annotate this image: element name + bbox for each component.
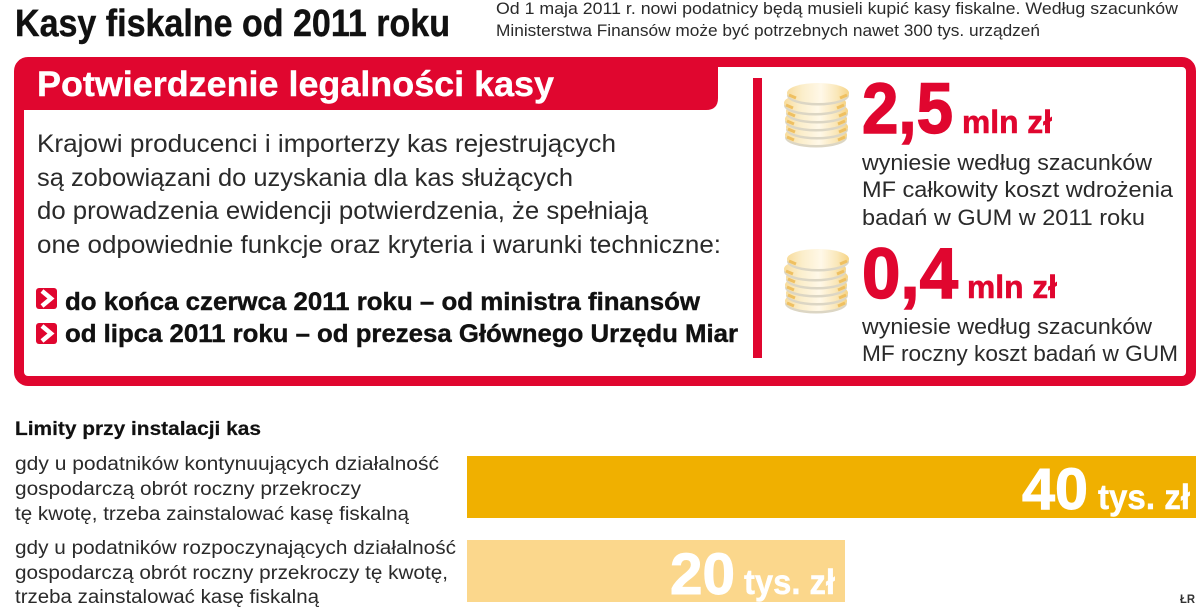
- body text: [37, 130, 721, 259]
- limit 40 description: tę kwotę, trzeba zainstalować kasę fiskalną: [15, 504, 409, 525]
- bar: 20 tys. zł: [467, 540, 845, 607]
- bar: 40 tys. zł: 40: [1022, 457, 1088, 522]
- bar: 40 tys. zł: tys. zł: [1098, 478, 1190, 517]
- stat text 1: wyniesie według szacunków: [861, 150, 1152, 175]
- limit 40 description: gdy u podatników kontynuujących działalność: [15, 454, 439, 475]
- body text: są zobowiązani do uzyskania dla kas służących: [37, 164, 573, 192]
- bar: 20 tys. zł: 20: [670, 542, 735, 607]
- stat text 1: MF całkowity koszt wdrożenia: [862, 177, 1174, 202]
- stat: 0,4 mln zł: mln zł: [967, 269, 1057, 305]
- bullet list: do końca czerwca 2011 roku – od ministra finansów: [65, 288, 701, 316]
- limits heading: Limity przy instalacji kas: [15, 419, 261, 440]
- heading tab: [19, 60, 718, 110]
- stat text 1: badań w GUM w 2011 roku: [862, 205, 1145, 230]
- stat text 2: MF roczny koszt badań w GUM: [862, 341, 1178, 366]
- bar: 20 tys. zł: tys. zł: [744, 563, 835, 602]
- bullet list: [36, 288, 738, 348]
- limit 20 description: gdy u podatników rozpoczynających działalność: [15, 538, 456, 559]
- limit 20 description: trzeba zainstalować kasę fiskalną: [15, 587, 319, 608]
- limit 40 description: [15, 454, 439, 525]
- stat: 2,5 mln zł: [862, 70, 1052, 149]
- stat text 2: [861, 314, 1178, 366]
- stat: 0,4 mln zł: 0,4: [862, 235, 958, 314]
- icon: coins 2: [784, 249, 849, 314]
- body text: Krajowi producenci i importerzy kas rejestrujących: [37, 130, 616, 158]
- body text: one odpowiednie funkcje oraz kryteria i warunki techniczne:: [37, 231, 721, 259]
- bullet list: od lipca 2011 roku – od prezesa Głównego Urzędu Miar: [65, 320, 738, 348]
- icon: coins 1: [784, 83, 849, 148]
- limit 40 description: gospodarczą obrót roczny przekroczy: [15, 479, 362, 500]
- stat: 2,5 mln zł: 2,5: [862, 70, 953, 149]
- heading tab: Potwierdzenie legalności kasy: [37, 65, 555, 104]
- bar: 40 tys. zł: [467, 456, 1196, 522]
- limit 20 description: gospodarczą obrót roczny przekroczy tę kwotę,: [15, 563, 448, 584]
- title: Kasy fiskalne od 2011 roku: [15, 3, 450, 45]
- stat text 1: [861, 150, 1174, 230]
- panel: potwierdzenie legalności kasy: [19, 60, 1191, 381]
- body text: do prowadzenia ewidencji potwierdzenia, że spełniają: [37, 197, 648, 225]
- limit 20 description: [15, 538, 456, 608]
- stat: 0,4 mln zł: [862, 235, 1057, 314]
- intro text: [496, 0, 1179, 40]
- stat text 2: wyniesie według szacunków: [861, 314, 1152, 339]
- intro text: Ministerstwa Finansów może być potrzebnych nawet 300 tys. urządzeń: [496, 21, 1040, 40]
- stat: 2,5 mln zł: mln zł: [962, 104, 1052, 140]
- credit: ŁR: [1180, 592, 1195, 606]
